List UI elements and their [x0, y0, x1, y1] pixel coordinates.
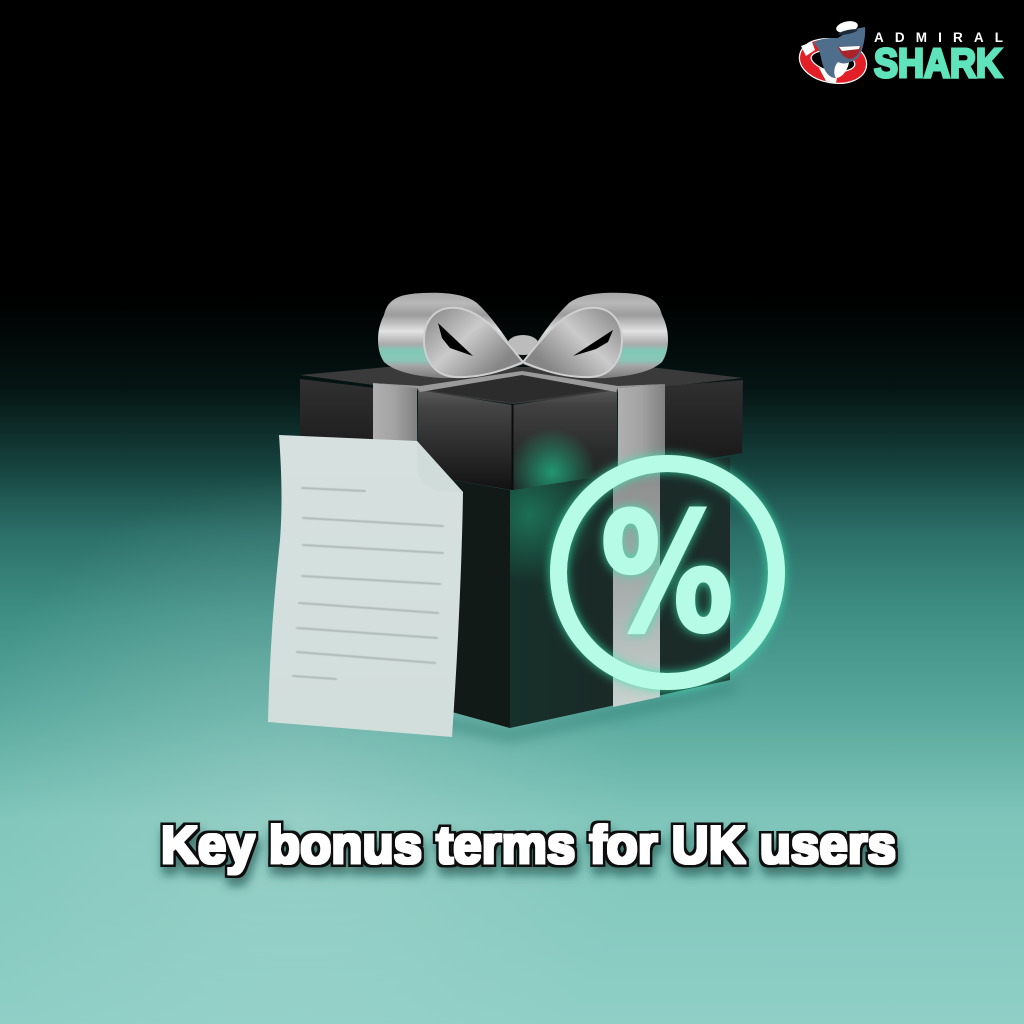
- shark mascot: [813, 19, 865, 78]
- lid ribbon bands: [373, 371, 665, 474]
- logo word: ADMIRAL: ADMIRAL: [874, 30, 1003, 45]
- document with text lines: [268, 435, 463, 737]
- paper lines: [293, 488, 443, 679]
- lifebuoy: [801, 40, 863, 83]
- logo: Admiral Shark: [801, 19, 1003, 86]
- paper sheet: [268, 435, 463, 737]
- box contact shadow: [440, 682, 735, 742]
- bow knot: [507, 335, 539, 355]
- title: Key bonus terms for UK users: [161, 816, 896, 875]
- gift box: [300, 293, 743, 742]
- logo word: SHARK: SHARK: [874, 40, 1002, 86]
- box body: [452, 457, 730, 728]
- percent icon: %: [600, 478, 734, 670]
- percent icon: [558, 464, 776, 682]
- bow: [378, 293, 668, 378]
- bow right loop: [523, 293, 668, 378]
- folded corner: [417, 441, 463, 492]
- box lid: [300, 367, 743, 490]
- bow left loop: [378, 293, 523, 378]
